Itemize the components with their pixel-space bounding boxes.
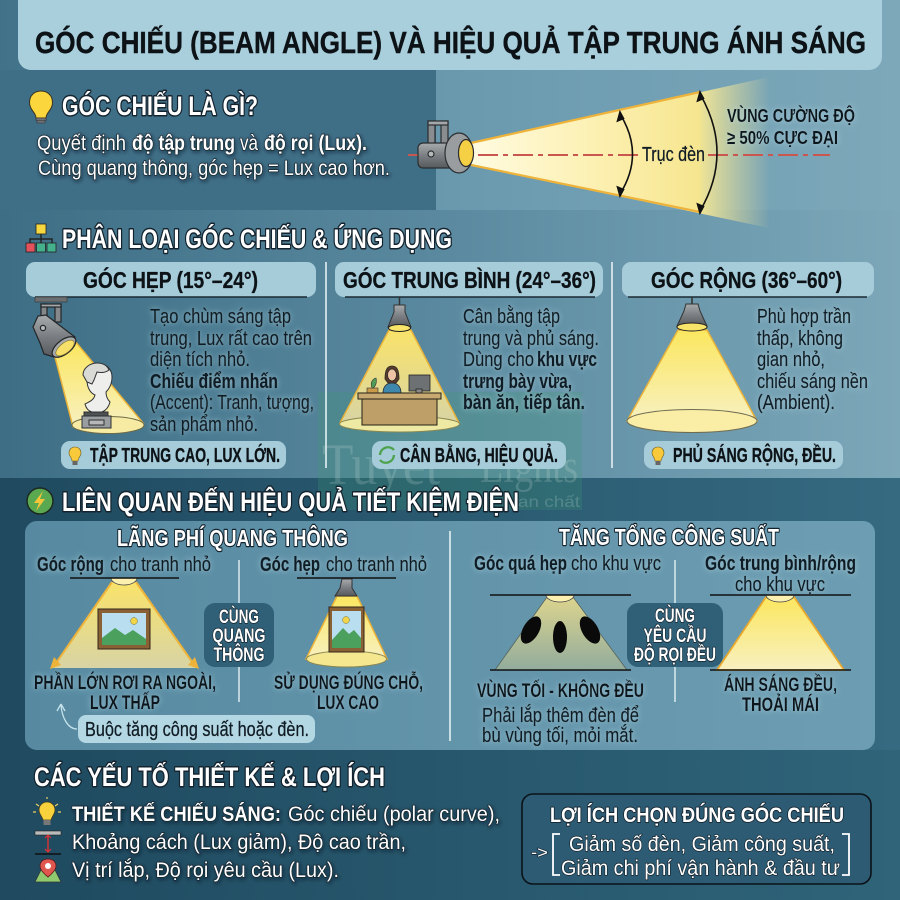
benefit box: ->: [531, 843, 548, 862]
description: diện tích nhỏ.: [150, 348, 250, 371]
definition text: độ tập trung: [132, 132, 235, 155]
benefit box: [522, 794, 871, 884]
definition text: Cùng quang thông, góc hẹp = Lux cao hơn.: [38, 157, 390, 180]
main divider: [449, 531, 451, 741]
inner divider: [238, 560, 240, 702]
callout: [78, 715, 315, 743]
description: trung và phủ sáng.: [463, 327, 599, 350]
description: chiếu sáng nền: [757, 370, 868, 393]
subheading: TĂNG TỔNG CÔNG SUẤT: [559, 523, 779, 550]
icon: hierarchy: [26, 224, 56, 252]
description: [150, 305, 314, 436]
description: (Accent): Tranh, tượng,: [150, 391, 314, 414]
column: góc hẹp: [26, 262, 316, 469]
section: góc chiếu là gì: [30, 90, 390, 180]
dark spots: [517, 613, 604, 653]
column header: [622, 262, 874, 297]
benefit box: Giảm số đèn, Giảm công suất,: [569, 833, 835, 856]
angle arc inner: [618, 112, 632, 196]
column header: [26, 262, 316, 297]
icon: ceiling height: [35, 831, 61, 854]
heading: PHÂN LOẠI GÓC CHIẾU & ỨNG DỤNG: [62, 223, 452, 254]
right caption: Góc trung bình/rộng: [705, 553, 856, 575]
inner divider: [674, 560, 676, 702]
badge: same illuminance: ĐỘ RỌI ĐỀU: [634, 642, 716, 666]
badge: same illuminance: YÊU CẦU: [644, 623, 706, 647]
desk: [358, 393, 441, 425]
title banner: [18, 0, 882, 70]
left result: LUX THẤP: [90, 692, 160, 714]
left caption: Góc quá hẹp: [474, 553, 567, 575]
right result: THOẢI MÁI: [742, 694, 819, 716]
description: thấp, không: [757, 327, 843, 350]
design factor line 3: Vị trí lắp, Độ rọi yêu cầu (Lux).: [72, 859, 339, 882]
illustration: reception desk: [340, 297, 460, 432]
arrow: [57, 704, 77, 729]
left caption: cho khu vực: [571, 553, 661, 575]
column header: GÓC HẸP (15°–24°): [83, 266, 258, 293]
description: Cân bằng tập: [463, 305, 560, 328]
column dividers: [326, 262, 612, 468]
right result: SỬ DỤNG ĐÚNG CHỖ,: [274, 672, 423, 694]
section: tiết kiệm điện: [25, 485, 875, 750]
spotlight lamp: [418, 121, 474, 173]
right caption: cho khu vực: [735, 574, 825, 596]
benefit box: LỢI ÍCH CHỌN ĐÚNG GÓC CHIẾU: [550, 803, 844, 827]
comparison panel: [25, 521, 875, 750]
angle arc outer: [698, 92, 717, 213]
intensity zone label: ≥ 50% CỰC ĐẠI: [727, 127, 838, 148]
monitor: [409, 375, 430, 393]
description: Phù hợp trần: [757, 305, 851, 328]
description: khu vực: [537, 348, 597, 371]
badge: same luminous flux: [204, 603, 274, 667]
takeaway pill: PHỦ SÁNG RỘNG, ĐỀU.: [673, 443, 836, 467]
subpanel: tăng tổng công suất: [474, 523, 856, 747]
takeaway pill: [372, 441, 566, 469]
icon: location pin on map: [35, 859, 61, 882]
icon: lighting bulb: [33, 797, 61, 825]
painting: [329, 607, 364, 652]
left caption: [474, 553, 661, 575]
axis label: Trục đèn: [642, 144, 705, 166]
left result: bù vùng tối, mỏi mắt.: [482, 724, 638, 747]
wide beam caption: [37, 554, 211, 576]
left result: VÙNG TỐI - KHÔNG ĐỀU: [477, 680, 644, 702]
section: yếu tố thiết kế và lợi ích: [33, 760, 871, 884]
watermark: [318, 392, 582, 511]
narrow beam caption: cho tranh nhỏ: [326, 554, 427, 576]
right result: LUX CAO: [317, 693, 379, 714]
wide beam caption: cho tranh nhỏ: [110, 554, 211, 576]
column header: GÓC RỘNG (36°–60°): [651, 266, 842, 293]
left result: Phải lắp thêm đèn để: [482, 704, 639, 727]
right result: [724, 674, 837, 716]
design factor line 1: THIẾT KẾ CHIẾU SÁNG:: [72, 803, 281, 826]
intensity zone label: [727, 105, 855, 148]
subheading: LÃNG PHÍ QUANG THÔNG: [117, 524, 348, 551]
definition text: Quyết định: [37, 132, 126, 155]
track spotlight: [33, 304, 79, 361]
illustration: wide beam on small painting: [50, 578, 199, 669]
description: trung, Lux rất cao trên: [150, 327, 312, 350]
design factor line 1: Góc chiếu (polar curve),: [288, 803, 500, 826]
watermark: Lights: [480, 440, 578, 493]
icon: energy bolt: [27, 488, 53, 514]
illustration: even lighting: [710, 595, 851, 670]
light beam: [471, 77, 769, 228]
right result: ÁNH SÁNG ĐỀU,: [724, 674, 837, 696]
left result: [477, 680, 644, 747]
takeaway pill: [644, 441, 843, 469]
definition text: độ rọi (Lux).: [264, 132, 367, 155]
benefit box: Giảm chi phí vận hành & đầu tư: [561, 857, 840, 880]
wide beam caption: Góc rộng: [37, 554, 104, 576]
column header: [335, 262, 603, 297]
icon: light bulb: [30, 91, 52, 123]
callout: Buộc tăng công suất hoặc đèn.: [85, 718, 309, 741]
narrow beam caption: Góc hẹp: [260, 554, 320, 576]
intensity zone label: VÙNG CƯỜNG ĐỘ: [727, 105, 855, 126]
illustration: wide cone: [627, 297, 757, 432]
description: trưng bày vừa,: [463, 370, 572, 393]
illustration: uneven lighting: [490, 595, 631, 670]
painting: [98, 609, 150, 649]
description: [757, 305, 868, 414]
left result: PHẦN LỚN RƠI RA NGOÀI,: [34, 672, 216, 694]
takeaway pill: CÂN BẰNG, HIỆU QUẢ.: [400, 443, 558, 467]
heading: CÁC YẾU TỐ THIẾT KẾ & LỢI ÍCH: [34, 760, 385, 792]
column: góc trung bình: [335, 262, 603, 469]
bust statue: [82, 363, 112, 428]
section: phân loại góc chiếu: [26, 223, 874, 469]
description: gian nhỏ,: [757, 348, 825, 371]
badge: same luminous flux: QUANG: [212, 625, 266, 647]
watermark: Tuyet: [322, 432, 440, 497]
right result: [274, 672, 423, 714]
plant: [367, 378, 378, 394]
receptionist: [383, 366, 401, 393]
badge: same luminous flux: THÔNG: [214, 642, 264, 666]
illustration: narrow beam on painting: [297, 578, 396, 667]
beam diagram: [408, 77, 855, 228]
definition text: và: [240, 132, 258, 155]
description: bàn ăn, tiếp tân.: [463, 391, 585, 414]
description: Tạo chùm sáng tập: [150, 305, 291, 328]
narrow beam caption: [260, 554, 427, 576]
illustration: spotlight on bust: [33, 297, 144, 434]
description: (Ambient).: [757, 391, 835, 414]
description: Chiếu điểm nhấn: [150, 370, 278, 393]
badge: same illuminance: [627, 603, 723, 667]
column: góc rộng: [622, 262, 874, 469]
design factor line 1: [72, 803, 500, 826]
right caption: [705, 553, 856, 596]
takeaway pill: [61, 441, 286, 469]
description: sản phẩm nhỏ.: [150, 413, 258, 436]
badge: same illuminance: CÙNG: [655, 603, 695, 627]
heading: GÓC CHIẾU LÀ GÌ?: [62, 90, 258, 121]
design factor line 2: Khoảng cách (Lux giảm), Độ cao trần,: [72, 831, 406, 854]
badge: same luminous flux: CÙNG: [219, 604, 259, 628]
watermark: an chất: [518, 494, 581, 511]
subpanel: lãng phí quang thông: [34, 524, 427, 743]
description: Dùng cho: [463, 348, 534, 371]
column header: GÓC TRUNG BÌNH (24°–36°): [343, 266, 596, 293]
definition text: [37, 132, 390, 180]
heading: LIÊN QUAN ĐẾN HIỆU QUẢ TIẾT KIỆM ĐIỆN: [62, 485, 519, 517]
takeaway pill: TẬP TRUNG CAO, LUX LỚN.: [90, 443, 280, 467]
lamp axis: [408, 154, 830, 156]
description: [463, 305, 599, 414]
left result: [34, 672, 216, 714]
